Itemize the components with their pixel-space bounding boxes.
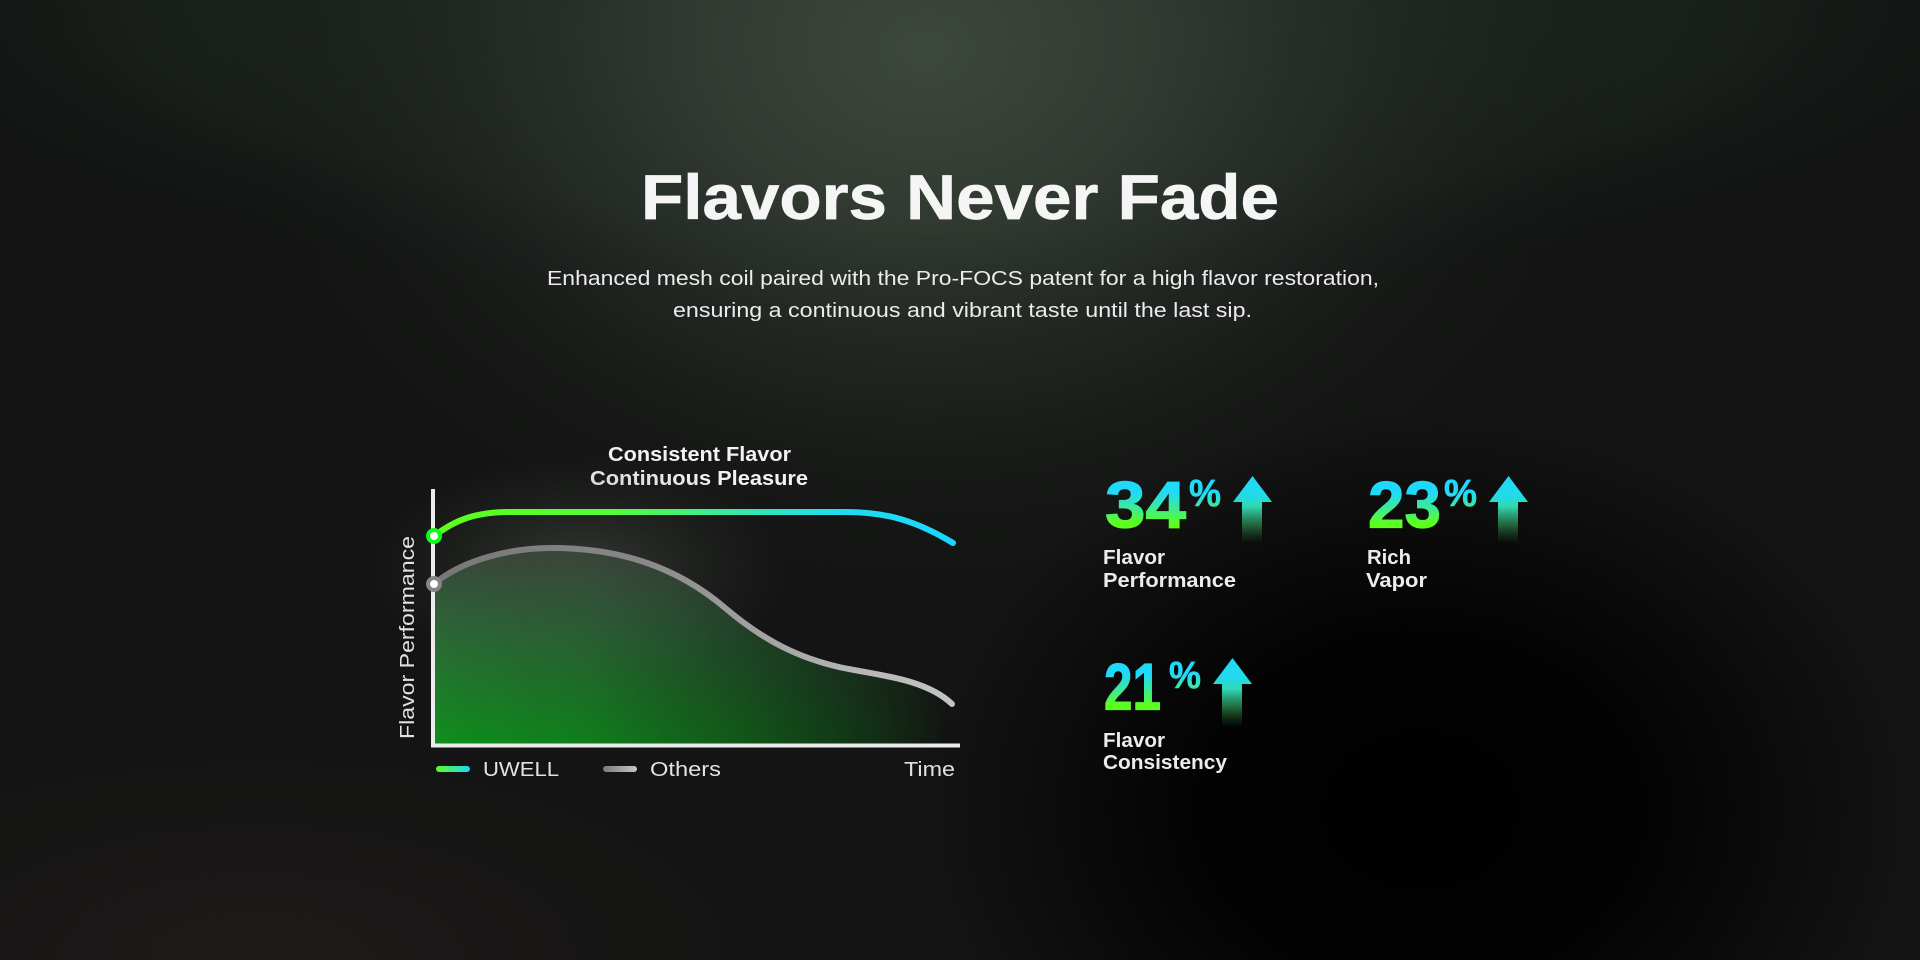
stat: 23% rich vapor bbox=[1366, 468, 1528, 592]
others curve bbox=[434, 548, 952, 704]
stat label bbox=[1103, 546, 1236, 592]
legend: others bbox=[606, 759, 721, 781]
area fill under others curve bbox=[435, 470, 926, 744]
panel: flavor performance line chart bbox=[370, 443, 960, 781]
icon: up arrow bbox=[1489, 476, 1528, 543]
stat label: Performance bbox=[1103, 569, 1236, 592]
title: Flavors Never Fade bbox=[641, 163, 1279, 233]
axes bbox=[433, 489, 960, 746]
chart heading: Consistent Flavor bbox=[608, 443, 791, 466]
subtitle text: Enhanced mesh coil paired with the Pro-FOCS patent for a high flavor restoration, bbox=[547, 267, 1379, 290]
number 23 percent: % bbox=[1444, 473, 1477, 515]
number 34 percent: % bbox=[1189, 473, 1221, 515]
stat label: Consistency bbox=[1103, 751, 1228, 774]
number 23 percent bbox=[1368, 468, 1477, 542]
icon: up arrow bbox=[1233, 476, 1272, 543]
stat label: Flavor bbox=[1103, 729, 1165, 752]
number 34 percent: 34 bbox=[1105, 468, 1186, 542]
stat: 21% flavor consistency bbox=[1103, 650, 1252, 774]
stat label: Vapor bbox=[1366, 569, 1427, 592]
stat label: Rich bbox=[1367, 546, 1411, 569]
legend: uwell bbox=[439, 759, 559, 781]
stat label bbox=[1366, 546, 1427, 592]
x axis label: Time bbox=[904, 759, 955, 781]
uwell start marker bbox=[428, 530, 440, 542]
number 21 percent: % bbox=[1169, 655, 1201, 697]
others start marker bbox=[428, 578, 440, 590]
legend: others: Others bbox=[650, 759, 721, 781]
uwell curve bbox=[434, 512, 953, 543]
subtitle text: ensuring a continuous and vibrant taste until the last sip. bbox=[673, 299, 1252, 322]
chart heading bbox=[590, 443, 808, 490]
y axis label: Flavor Performance bbox=[397, 536, 419, 739]
number 23 percent: 23 bbox=[1368, 468, 1441, 542]
stat: 34% flavor performance bbox=[1103, 468, 1272, 592]
stat label bbox=[1103, 729, 1228, 774]
legend: uwell: UWELL bbox=[483, 759, 559, 781]
icon: up arrow bbox=[1213, 658, 1252, 727]
number 21 percent: 21 bbox=[1104, 650, 1161, 724]
chart heading: Continuous Pleasure bbox=[590, 467, 808, 490]
subtitle text bbox=[547, 267, 1379, 322]
number 34 percent bbox=[1105, 468, 1221, 542]
stat label: Flavor bbox=[1103, 546, 1165, 569]
